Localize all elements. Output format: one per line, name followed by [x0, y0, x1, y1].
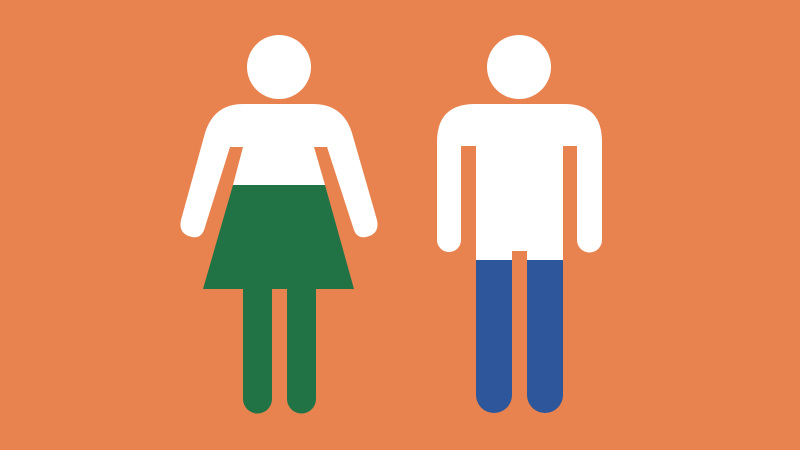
woman upper body and arms: [180, 104, 378, 237]
figure: man: [437, 35, 602, 413]
man trousers: [476, 260, 563, 413]
man head: [487, 35, 551, 99]
man torso and arms: [437, 104, 602, 260]
woman legs: [243, 288, 316, 414]
figure: woman: [180, 35, 378, 414]
woman skirt: [203, 185, 354, 289]
woman head: [247, 35, 311, 99]
